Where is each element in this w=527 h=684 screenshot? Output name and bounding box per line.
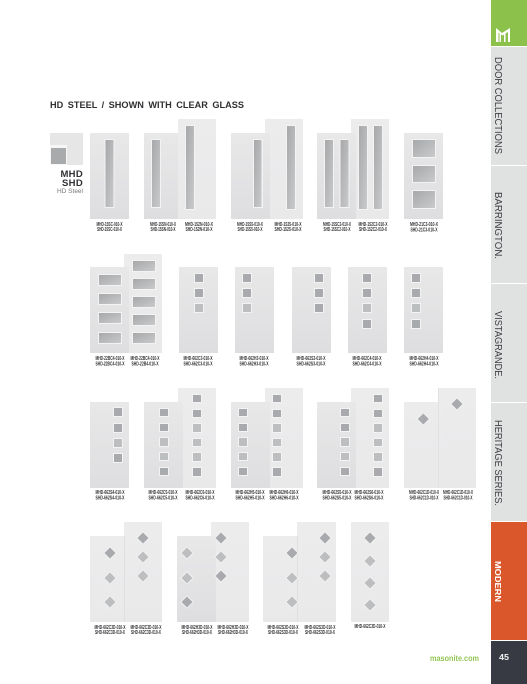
door codes: SHD-662C3-010-X [184,362,213,368]
sidebar tab: heritage series [491,403,527,521]
sidebar tab: modern [491,522,527,640]
door codes: SHD-662S3D-010-X [305,630,335,636]
door codes: MHD-662H3-010-X [240,356,269,362]
door: 662C4 [348,267,387,368]
door codes: SHD-15SC-010-X [97,227,122,233]
door codes: SHD-662C5-010-X [148,496,178,502]
page number: 45 [499,653,510,662]
door: 15SC [90,133,129,233]
door codes: MHD-662S4-010-X [96,490,125,496]
door codes: MHD-662H4-010-X [410,356,439,362]
sidebar tab: door collections: DOOR COLLECTIONS [492,57,503,154]
door codes [410,222,438,234]
material label [57,169,84,195]
sidebar tab: barrington: BARRINGTON. [492,192,503,259]
door: 662S4 [90,402,129,502]
door codes: MHD-662C4-010-X [352,356,382,362]
door codes: MHD-662C6-010-X [186,490,215,496]
door codes: MHD-15SC2-010-X [323,222,351,228]
door: 662H3 [235,267,274,368]
door codes: SHD-15SN-010-X [150,227,176,233]
door codes [96,222,123,233]
door codes: MHD-662H3D-010-X [182,625,213,631]
door codes [182,625,249,636]
door pair: 662H3D [177,522,249,636]
door codes: MHD-662S5-010-X [322,490,352,496]
door codes: MHD-662C3D-010-X [130,625,162,631]
door codes [237,222,302,233]
door pair: 662C3D [90,522,162,636]
door codes: MHD-662C3D-010-X [94,625,126,631]
door codes: SHD-662S5-010-X [322,496,352,502]
door codes [184,356,213,368]
door codes: MHD-15SN-010-X [150,222,176,228]
door codes: MHD-662S3-010-X [296,356,326,362]
door codes: MHD-662S3D-010-X [304,625,336,631]
sidebar tab: barrington [491,166,527,283]
door codes [296,356,326,368]
door codes: MHD-15S5-010-X [237,222,263,228]
door pair: 662H5 and 662H6 [231,388,303,502]
door codes: MHD-662H3D-010-X [218,625,249,631]
sidebar tab: modern: MODERN [493,561,503,602]
door codes: SHD-662H3D-010-X [182,630,212,636]
door codes: SHD-662C3D-010-X [95,630,125,636]
sidebar tab: door collections [491,47,527,165]
door codes [236,490,299,502]
door code: MHD-662C3D-010-X [354,624,386,630]
door codes: MHD-662S3D-010-X [268,625,299,631]
door codes: MHD-15SC-010-X [96,222,123,228]
door: 662C3 [179,267,218,368]
door codes: SHD-662C1D-010-X [444,496,473,502]
door codes [94,625,162,636]
door codes: MHD-662C5-010-X [148,490,178,496]
door codes: MHD-1525-010-X [274,222,302,228]
website url: masonite.com [430,653,479,663]
material label: MHD [60,169,83,180]
door codes: MHD-662S6-010-X [354,490,384,496]
door codes: SHD-22BC4-010-X [96,362,125,368]
door pair: 662C5 and 662C6 [144,388,216,502]
door codes: MHD-662C1D-010-X [443,490,473,496]
door codes [323,222,388,233]
material swatch [50,133,83,165]
door pair: 662C1D single diamond [404,388,476,502]
door codes [322,490,384,502]
door codes: MHD-21C3-010-X [410,222,438,228]
door codes [240,356,269,368]
door codes: SHD-662H3D-010-X [218,630,248,636]
door codes: SHD-662H3-010-X [240,362,269,368]
door codes: MHD-152C2-010-X [358,222,388,228]
door codes [150,222,213,233]
door: 21C3 [404,133,443,234]
door codes: SHD-662S3D-010-X [268,630,298,636]
door codes: SHD-15SC2-010-X [324,227,351,233]
door pair: 662S5 and 662S6 [317,388,389,502]
door codes: SHD-662C1D-010-X [410,496,439,502]
door codes: MHD-662H6-010-X [270,490,299,496]
material label: SHD [62,178,83,189]
door codes: SHD-152N-010-X [186,227,213,233]
sidebar tab: heritage series: HERITAGE SERIES. [492,420,503,506]
door codes: SHD-22B4-010-X [132,362,159,368]
door: 662C3D tall with four diamonds [351,522,389,630]
door codes: SHD-662C4-010-X [352,362,382,368]
sidebar [491,0,527,684]
door codes [96,356,160,368]
door pair: 662S3D [263,522,336,636]
door codes: SHD-15S5-010-X [238,227,263,233]
door codes [352,356,382,368]
door codes: SHD-1525-010-X [274,227,302,233]
sidebar tab: vistagrande: VISTAGRANDE. [492,311,503,379]
door codes: MHD-662H5-010-X [236,490,265,496]
door codes: SHD-152C2-010-X [359,227,387,233]
door codes [148,490,215,502]
icon: brand logo [496,28,510,42]
door codes: SHD-662H5-010-X [236,496,265,502]
door pair: 15SN and 152N [144,119,216,233]
door codes [410,356,439,368]
door pair: 22BC4 with 5 lites [90,254,162,368]
door codes: SHD-662S4-010-X [96,496,125,502]
page number [491,641,527,684]
material label: HD Steel [57,188,84,195]
door codes: SHD-662C3D-010-X [131,630,161,636]
door codes: MHD-22BC4-010-X [130,356,160,362]
door codes: SHD-21C3-010-X [410,228,438,234]
door codes: MHD-152N-010-X [185,222,213,228]
title: HD STEEL / SHOWN WITH CLEAR GLASS [50,100,244,111]
door: 662H4 [404,267,443,368]
door codes [96,490,125,502]
sidebar tab: vistagrande [491,284,527,402]
door codes: SHD-662C6-010-X [186,496,215,502]
door codes: SHD-662H4-010-X [410,362,439,368]
door codes: MHD-662C3-010-X [184,356,213,362]
door codes [268,625,336,636]
door codes: SHD-662S6-010-X [354,496,384,502]
door: 662S3 [292,267,331,368]
door codes [409,490,473,502]
door codes: SHD-662S3-010-X [296,362,326,368]
sidebar tab: brand [491,0,527,46]
door codes: MHD-22BC4-010-X [96,356,125,362]
door pair: 15SC2 and 152C2 [317,119,389,233]
door pair: 15S5 and 1525 [231,119,303,233]
door codes: SHD-662H6-010-X [270,496,299,502]
door codes: MHD-662C1D-010-X [409,490,439,496]
